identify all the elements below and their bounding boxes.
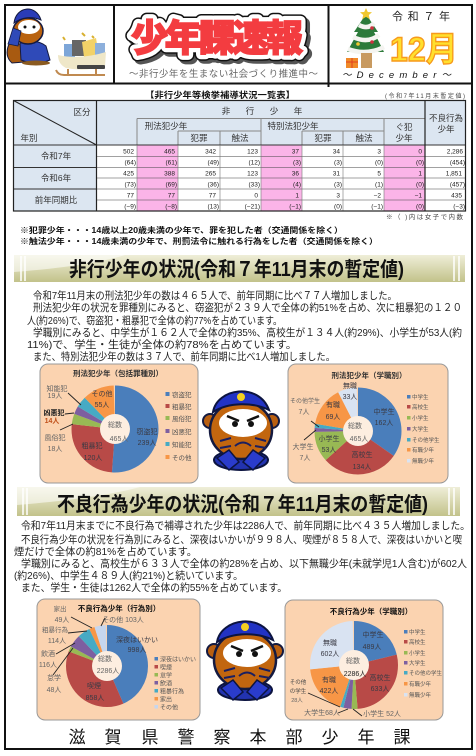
table footnote: ※（ )内は女子で内数	[386, 212, 464, 221]
chart labels: school status: 162人	[375, 419, 393, 427]
panel: chart misbehaviour type: 不良行為少年（行為別）	[78, 603, 160, 613]
chart legend: offence type: その他	[172, 453, 192, 462]
chart legend: school status: 無職少年	[412, 457, 435, 465]
table: arrest and guidance status: 刑法犯少年	[145, 121, 188, 131]
chart legend: school status misbehaviour: 有職少年	[409, 680, 432, 688]
chart labels: offence type: 知能犯	[46, 384, 68, 393]
table: arrest and guidance status: 不良行為	[429, 113, 463, 123]
panel: chart school status misbehaviour	[285, 600, 443, 720]
chart labels: school status: 53人	[322, 446, 336, 454]
chart legend: offence type	[166, 390, 192, 462]
chart labels: school status misbehaviour: 633人	[371, 685, 389, 693]
table: arrest and guidance status: 3	[377, 148, 381, 156]
table: arrest and guidance status: 前年同期比	[35, 195, 78, 205]
text: delinquent juveniles summary: また、特別法犯少年の数は３７人で、前年同期に比べ1人増加しました。	[33, 350, 335, 363]
chart legend: school status: その他学生	[412, 436, 440, 444]
table: arrest and guidance status: 123	[247, 170, 258, 178]
chart labels: misbehaviour type: 114人	[48, 637, 66, 645]
chart labels: school status: 無職	[343, 381, 357, 390]
table: arrest and guidance status: 123	[247, 148, 258, 156]
table: arrest and guidance status: (3)	[334, 160, 342, 166]
table: arrest and guidance status: (−1)	[289, 204, 301, 210]
table date note: (令和7年11月末暫定値)	[385, 92, 465, 100]
table: arrest and guidance status: 犯罪	[314, 133, 332, 143]
chart legend: misbehaviour type: その他	[160, 704, 178, 712]
title: 少年課速報	[131, 18, 303, 59]
table: arrest and guidance status: (13)	[207, 204, 219, 210]
chart labels: school status misbehaviour: 小学生 52人	[363, 709, 401, 718]
chart labels: school status misbehaviour: 422人	[320, 687, 338, 695]
chart labels: school status	[290, 381, 394, 471]
text: misbehaving juveniles summary	[14, 519, 470, 594]
table: arrest and guidance status: 1,851	[446, 170, 462, 178]
table: arrest and guidance status: 77	[168, 192, 175, 200]
chart legend: offence type: 凶悪犯	[172, 427, 192, 436]
table: arrest and guidance status: 0	[254, 192, 258, 200]
chart labels: school status misbehaviour: 中学生	[362, 630, 384, 639]
table: arrest and guidance status: (69)	[165, 182, 177, 188]
table: arrest and guidance status: (33)	[248, 182, 260, 188]
chart labels: school status misbehaviour: 2286人	[344, 670, 366, 678]
definitions of juvenile offenders: ※犯罪少年・・・14歳以上20歳未満の少年で、罪を犯した者（交通関係を除く）	[20, 225, 343, 235]
chart labels: school status: 69人	[326, 413, 340, 421]
chart labels: offence type: 120人	[84, 454, 102, 462]
chart legend: school status misbehaviour: 小学生	[409, 649, 426, 657]
table: arrest and guidance status: 502	[123, 148, 134, 156]
text: delinquent juveniles summary	[27, 289, 462, 363]
chart legend: school status: 有職少年	[412, 446, 435, 454]
table: arrest and guidance status: (−21)	[245, 204, 260, 210]
chart labels: school status: 大学生	[292, 442, 314, 451]
table: arrest and guidance status: (0)	[416, 204, 424, 210]
chart labels: school status: 高校生	[352, 450, 372, 459]
chart labels: misbehaviour type: 48人	[47, 686, 61, 694]
chart legend: school status: 小学生	[412, 414, 429, 422]
title: 少年課速報	[134, 21, 306, 62]
chart labels: school status misbehaviour: 489人	[363, 643, 381, 651]
table: arrest and guidance status: 区分	[73, 107, 91, 117]
heading: misbehaving juveniles	[17, 487, 460, 516]
panel: chart offence type	[40, 364, 198, 483]
chart legend: misbehaviour type: 家出	[160, 696, 172, 704]
chart legend: offence type: 風俗犯	[172, 414, 192, 423]
panel: chart school status: 刑法犯少年（学職別）	[332, 370, 406, 380]
chart labels: school status: 33人	[343, 393, 357, 401]
date: December: ～December～	[342, 70, 452, 81]
chart labels: school status misbehaviour: 大学生68人	[304, 708, 340, 717]
panel: chart school status misbehaviour: 不良行為少年（学職別）	[330, 606, 412, 616]
icon: mascot lower	[207, 621, 283, 700]
chart legend: school status: 中学生	[412, 393, 429, 401]
icon: police sleigh with gifts	[56, 33, 106, 75]
table: arrest and guidance status: 34	[333, 148, 340, 156]
table: arrest and guidance status: 年	[294, 106, 303, 116]
table: arrest and guidance status: (457)	[450, 182, 465, 188]
heading: misbehaving juveniles: 不良行為少年の状況(令和７年11月末の暫定値)	[57, 493, 428, 516]
chart labels: offence type: 239人	[138, 439, 156, 447]
chart labels: misbehaviour type: 喫煙	[87, 681, 101, 690]
panel: chart misbehaviour type	[37, 599, 200, 720]
chart labels: offence type: 14人	[45, 417, 59, 425]
table: arrest and guidance status: (73)	[124, 182, 136, 188]
table: arrest and guidance status: 77	[127, 192, 134, 200]
table: arrest and guidance status: (3)	[293, 160, 301, 166]
chart labels: school status: 7人	[300, 454, 310, 462]
chart labels: school status: 小学生	[318, 434, 340, 443]
text: misbehaving juveniles summary: (約26%)、中学生４８９人(約21%)と続いています。	[14, 569, 243, 582]
table: arrest and guidance status: (0)	[416, 182, 424, 188]
chart labels: school status: その他学生	[290, 397, 320, 405]
text: misbehaving juveniles summary: 煙だけで全体の約81%を占めています。	[14, 545, 197, 558]
footer: issuing department: 滋賀県警察本部少年課	[68, 728, 410, 747]
donut chart: offence type	[93, 407, 137, 451]
table: arrest and guidance status: (49)	[207, 160, 219, 166]
text: misbehaving juveniles summary: また、学生・生徒は1262人で全体の約55%を占めています。	[21, 581, 287, 594]
table: arrest and guidance status: 令和6年	[41, 173, 72, 183]
chart labels: offence type: 窃盗犯	[136, 427, 158, 436]
definitions of juvenile offenders: ※触法少年・・・14歳未満の少年で、刑罰法令に触れる行為をした者（交通関係を除く）	[20, 236, 378, 246]
chart labels: misbehaviour type: その他 103人	[102, 615, 144, 624]
table: arrest and guidance status: (−1)	[371, 204, 383, 210]
chart labels: school status: 465人	[350, 435, 368, 443]
chart labels: school status misbehaviour: その他	[290, 678, 307, 686]
table: arrest and guidance status: 77	[209, 192, 216, 200]
chart labels: offence type: 風俗犯	[44, 433, 66, 442]
chart labels: school status: 総数	[348, 421, 362, 430]
table: arrest and guidance status: (0)	[375, 160, 383, 166]
heading: delinquent juveniles	[14, 255, 465, 282]
chart labels: offence type: 55人	[95, 401, 109, 409]
table: arrest and guidance status: 1	[418, 170, 422, 178]
chart labels: offence type: その他	[92, 389, 112, 398]
table: arrest and guidance status: (−9)	[124, 204, 136, 210]
table: arrest and guidance status: 年別	[20, 133, 38, 143]
table: arrest and guidance status: (4)	[293, 182, 301, 188]
table: arrest and guidance status: (−3)	[453, 204, 465, 210]
icon: saluting mascot	[7, 9, 50, 66]
donut chart: misbehaviour type	[86, 646, 128, 686]
chart labels: offence type: 465人	[110, 435, 128, 443]
table: arrest and guidance status: −1	[415, 192, 422, 200]
chart labels: misbehaviour type: 深夜はいかい	[116, 635, 158, 644]
chart legend: school status misbehaviour: その他の学生	[409, 669, 443, 677]
table: arrest and guidance status: 3	[336, 192, 340, 200]
chart labels: misbehaviour type: 49人	[55, 616, 69, 624]
chart labels: school status: 7人	[299, 408, 309, 416]
chart labels: offence type: 凶悪犯	[44, 408, 64, 417]
chart labels: misbehaviour type: 総数	[98, 654, 112, 663]
chart legend: school status: 高校生	[412, 403, 429, 411]
table: arrest and guidance status: 触法	[355, 133, 373, 143]
chart labels: school status: 134人	[353, 463, 371, 471]
chart labels: school status misbehaviour: 総数	[346, 656, 360, 665]
table: arrest and guidance status: 37	[292, 148, 299, 156]
table: arrest and guidance status: (36)	[207, 182, 219, 188]
chart labels: offence type: 粗暴犯	[82, 441, 102, 450]
chart labels: offence type	[44, 384, 158, 462]
text: delinquent juveniles summary: 令和7年11月末の刑法犯少年の数は４６５人で、前年同期に比べ７７人増加しました。	[33, 289, 397, 302]
table: arrest and guidance status: 388	[164, 170, 175, 178]
table: arrest and guidance status: −2	[374, 192, 381, 200]
table: arrest and guidance status: 非	[222, 106, 231, 116]
table: arrest and guidance status: 265	[205, 170, 216, 178]
text: delinquent juveniles summary: 11%)で、学生・生徒が全体の約78%を占めています。	[27, 338, 297, 351]
table: arrest and guidance status: 2,286	[447, 148, 463, 156]
chart legend: misbehaviour type: 怠学	[160, 672, 172, 680]
table: arrest and guidance status: 少年	[395, 133, 413, 143]
icon: christmas tree	[346, 8, 384, 68]
chart legend: school status: 大学生	[412, 425, 429, 433]
table: arrest and guidance status: 342	[205, 148, 216, 156]
chart labels: misbehaviour type: 116人	[39, 661, 57, 669]
date: reiwa year: 令和７年	[392, 9, 450, 23]
table: arrest and guidance status: 1	[295, 192, 299, 200]
table: arrest and guidance status: 行	[246, 106, 255, 116]
title: 少年課速報	[131, 18, 303, 59]
table: arrest and guidance status: 425	[123, 170, 134, 178]
chart legend: offence type: 窃盗犯	[172, 390, 192, 399]
chart labels: misbehaviour type: 998人	[128, 646, 146, 654]
table: arrest and guidance status: 犯罪	[190, 133, 208, 143]
table: arrest and guidance status: 特別法犯少年	[267, 121, 319, 131]
table: arrest and guidance status: 0	[418, 148, 422, 156]
chart labels: school status: 中学生	[374, 407, 394, 416]
table: arrest and guidance status	[14, 100, 466, 211]
chart labels: misbehaviour type	[39, 604, 158, 702]
table: arrest and guidance status: 31	[333, 170, 340, 178]
pie chart: school status misbehaviour	[332, 643, 376, 687]
text: delinquent juveniles summary: 人(約26%)で、窃盗犯・粗暴犯で全体の約77%を占めています。	[27, 314, 282, 327]
chart legend: school status misbehaviour: 高校生	[409, 638, 426, 646]
chart labels: misbehaviour type: 2286人	[97, 667, 119, 675]
chart labels: school status misbehaviour: 高校生	[370, 673, 390, 682]
chart legend: misbehaviour type: 深夜はいかい	[160, 656, 196, 664]
donut chart: school status	[336, 409, 380, 453]
table: arrest and guidance status: 令和7年	[41, 151, 72, 161]
chart labels: misbehaviour type: 家出	[54, 604, 66, 613]
definitions of juvenile offenders	[20, 225, 378, 246]
chart labels: misbehaviour type: 858人	[86, 694, 104, 702]
table: arrest and guidance status: ぐ犯	[395, 122, 413, 132]
date: month: 12月	[390, 31, 458, 69]
table: arrest and guidance status: (0)	[334, 204, 342, 210]
chart labels: offence type: 総数	[108, 420, 122, 429]
table: arrest and guidance status: (64)	[124, 160, 136, 166]
table: arrest and guidance status: 435	[451, 192, 462, 200]
chart legend: school status misbehaviour: 無職少年	[409, 691, 432, 699]
icon: mascot middle	[203, 391, 279, 470]
subtitle: ～非行少年を生まない社会づくり推進中～	[129, 68, 318, 80]
chart labels: school status misbehaviour: 602人	[321, 650, 339, 658]
chart legend: school status misbehaviour: 中学生	[409, 628, 426, 636]
chart labels: misbehaviour type: 粗暴行為	[42, 625, 68, 634]
panel: chart school status	[288, 364, 448, 483]
title: 少年課速報	[131, 18, 303, 59]
chart labels: offence type: 18人	[48, 445, 62, 453]
table: arrest and guidance status: (1)	[375, 182, 383, 188]
table: arrest and guidance status: (454)	[450, 160, 465, 166]
chart labels: school status misbehaviour: 有職	[322, 675, 336, 684]
chart legend: offence type: 知能犯	[172, 440, 192, 449]
table: arrest and guidance status: 36	[292, 170, 299, 178]
chart labels: school status misbehaviour: 28人	[291, 698, 303, 704]
chart labels: misbehaviour type: 怠学	[47, 673, 61, 682]
heading: delinquent juveniles: 非行少年の状況(令和７年11月末の暫定値)	[69, 258, 404, 281]
table: arrest and guidance status: (61)	[165, 160, 177, 166]
chart legend: misbehaviour type: 飲酒	[160, 680, 172, 688]
table: arrest and guidance status: (12)	[248, 160, 260, 166]
chart labels: school status misbehaviour: 無職	[323, 638, 337, 647]
table: arrest and guidance status: 5	[377, 170, 381, 178]
table: arrest and guidance status: (3)	[334, 182, 342, 188]
table: arrest and guidance status: (−8)	[165, 204, 177, 210]
chart labels: offence type: 19人	[48, 392, 62, 400]
chart labels: school status: 有職	[326, 400, 340, 409]
panel: chart offence type: 刑法犯少年（包括罪種別）	[73, 368, 163, 378]
chart legend: school status misbehaviour	[404, 628, 443, 699]
chart labels: school status misbehaviour: の学生	[290, 687, 307, 695]
chart legend: school status	[407, 393, 440, 465]
chart legend: school status misbehaviour: 大学生	[409, 659, 426, 667]
table: arrest and guidance status: 触法	[231, 133, 249, 143]
chart legend: offence type: 粗暴犯	[172, 402, 192, 411]
chart labels: school status misbehaviour	[290, 630, 401, 718]
chart legend: misbehaviour type	[154, 656, 196, 712]
chart labels: misbehaviour type: 飲酒	[41, 649, 55, 658]
table: arrest and guidance status: 少	[270, 106, 279, 116]
table: arrest and guidance status: 465	[164, 148, 175, 156]
chart legend: misbehaviour type: 喫煙	[160, 664, 172, 672]
table heading: 【非行少年等検挙補導状況一覧表】	[145, 90, 295, 100]
chart legend: misbehaviour type: 粗暴行為	[160, 688, 184, 696]
table: arrest and guidance status: 少年	[437, 124, 455, 134]
table: arrest and guidance status: (0)	[416, 160, 424, 166]
